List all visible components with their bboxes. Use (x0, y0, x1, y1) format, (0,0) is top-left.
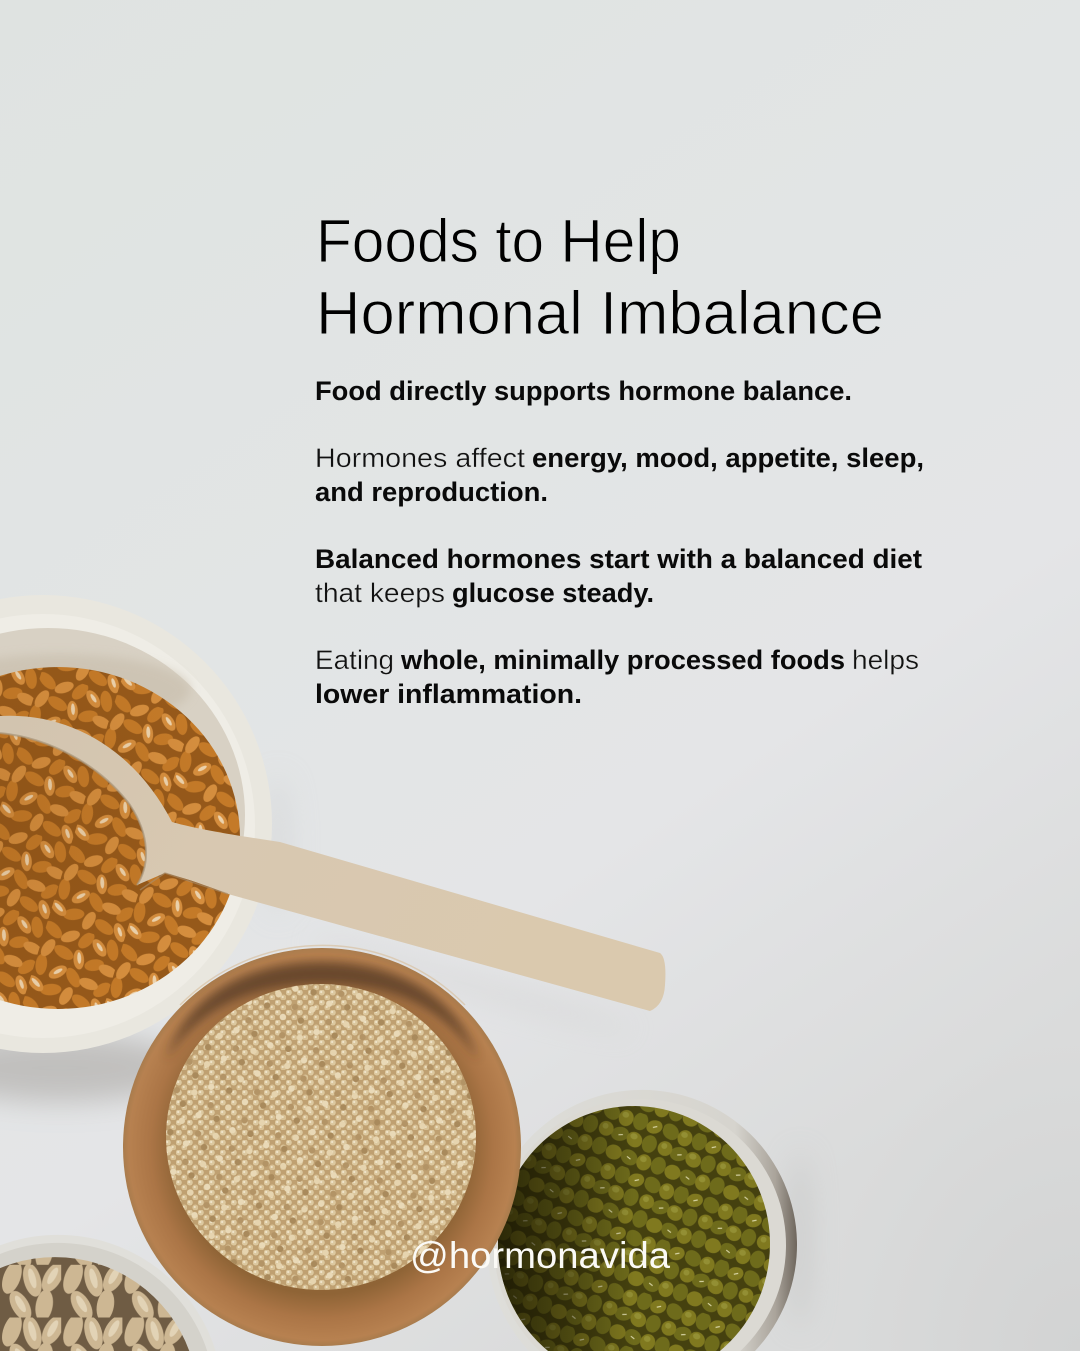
text block: body copy (315, 376, 924, 709)
bowl shadows (0, 775, 810, 1330)
paragraph: what hormones affect: and reproduction. (315, 477, 548, 507)
handle: @hormonavida: @hormonavida (410, 1235, 670, 1276)
bowl body (123, 948, 521, 1346)
title (316, 207, 884, 347)
paragraph: whole foods: whole, minimally processed foods (400, 645, 845, 675)
icon: brown bowl with quinoa (123, 945, 521, 1346)
paragraph: whole foods (315, 645, 919, 709)
paragraph: balanced diet: glucose steady. (452, 578, 654, 608)
paragraph: balanced diet: that keeps (315, 578, 445, 608)
quinoa (166, 984, 476, 1290)
paragraph: food supports balance: Food directly supports hormone balance. (315, 376, 852, 406)
paragraph: whole foods: lower inflammation. (315, 679, 582, 709)
icon: sunflower seeds glass bowl (0, 1235, 216, 1351)
flaxseed (0, 667, 240, 1009)
bowl rim (0, 595, 272, 1053)
title: Foods to Help (316, 207, 681, 275)
paragraph: what hormones affect: Hormones affect (315, 443, 526, 473)
paragraph: what hormones affect (315, 443, 924, 507)
paragraph: balanced diet: Balanced hormones start with a balanced diet (315, 544, 922, 574)
paragraph: balanced diet (315, 544, 922, 608)
paragraph: whole foods: Eating (315, 645, 394, 675)
icon: mung beans glass bowl (487, 1090, 797, 1351)
paragraph: whole foods: helps (852, 645, 919, 675)
icon: white bowl with flaxseed (0, 595, 272, 1053)
icon: wooden spoon (0, 716, 665, 1011)
title: Hormonal Imbalance (316, 279, 884, 347)
paragraph: what hormones affect: energy, mood, appetite, sleep, (532, 443, 924, 473)
